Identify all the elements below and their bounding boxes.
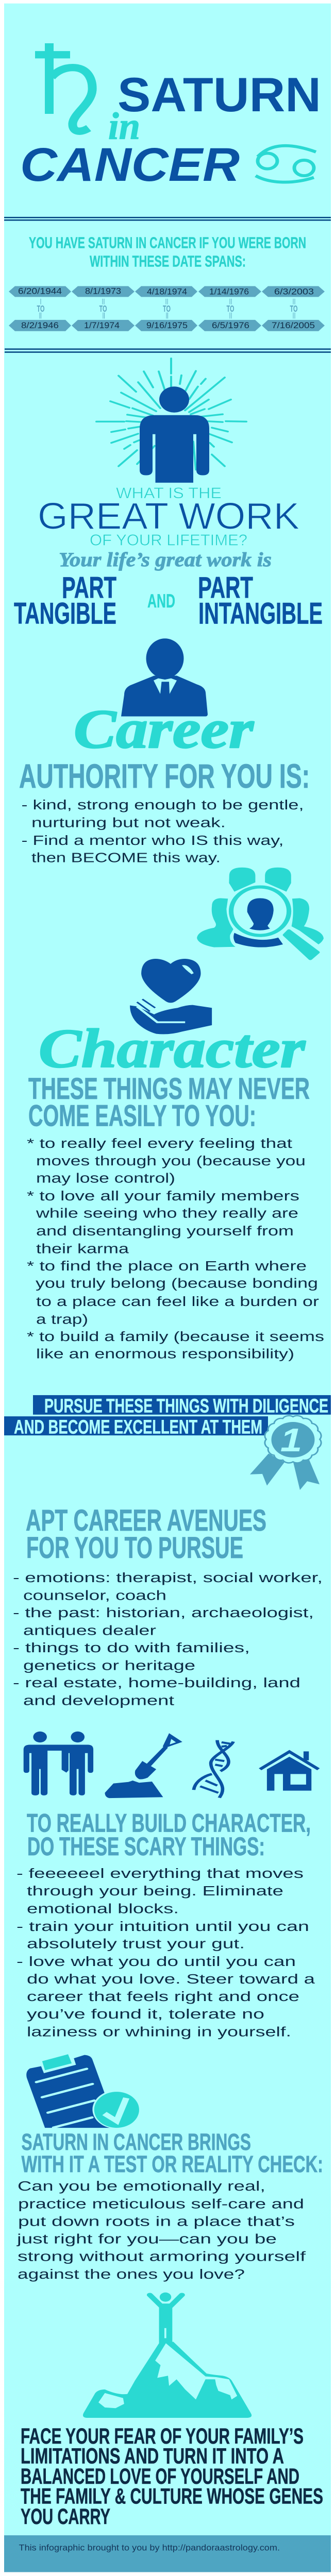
- date hexagons: [9, 286, 325, 331]
- paragraph: reality check questions: just right for you—can you be: [16, 2232, 277, 2247]
- hand: [130, 1005, 212, 1034]
- start dates: 8/1/1973: [85, 286, 121, 296]
- icon: magnifier over people: [197, 868, 324, 959]
- list: authority: then BECOME this way.: [31, 851, 221, 866]
- list: scary things: - love what you do until you can: [16, 1954, 296, 1970]
- icon: number one rosette: [250, 1416, 321, 1490]
- list: career avenues: - real estate, home-building, land: [13, 1675, 300, 1690]
- list: career avenues: - the past: historian, archaeologist,: [13, 1605, 314, 1620]
- list: things that never come easily: while seeing who they really are: [36, 1206, 298, 1221]
- person silhouette: [140, 386, 209, 483]
- left: part tangible: PART: [62, 570, 116, 604]
- list: authority: - Find a mentor who IS this way,: [22, 833, 284, 848]
- icon: house: [260, 1751, 319, 1791]
- right: part intangible: [198, 570, 323, 630]
- TO connectors: TO: [99, 303, 107, 314]
- start dates: 1/14/1976: [209, 286, 249, 296]
- list: things that never come easily: [27, 1136, 324, 1362]
- TO connectors: TO: [37, 303, 45, 314]
- part tangible and part intangible: [14, 570, 323, 630]
- heading: build character: [27, 1808, 311, 1861]
- paragraph: reality check questions: practice meticulous self-care and: [18, 2197, 304, 2212]
- start dates: 6/20/1944: [18, 286, 62, 296]
- list: things that never come easily: you truly belong (because bonding: [36, 1276, 318, 1291]
- end dates: 8/2/1946: [21, 320, 59, 330]
- hand gap and finger lines: [137, 1006, 185, 1022]
- icon: two people: [24, 1732, 93, 1795]
- snow cap: [155, 2343, 237, 2399]
- list: things that never come easily: their karma: [36, 1242, 129, 1257]
- list: scary things: [16, 1866, 315, 2040]
- divider: [5, 348, 331, 353]
- end dates: [21, 320, 315, 330]
- end dates: 1/7/1974: [84, 320, 120, 330]
- list: things that never come easily: * to really feel every feeling that: [27, 1136, 292, 1151]
- list: scary things: - train your intuition until you can: [16, 1919, 309, 1934]
- list: scary things: through your being. Eliminate: [27, 1884, 283, 1899]
- list: career avenues: [13, 1570, 323, 1708]
- list: scary things: do what you love. Steer toward a: [27, 1972, 315, 1987]
- text: and: AND: [147, 590, 175, 612]
- start dates: 6/3/2003: [274, 286, 314, 296]
- list: scary things: - feeeeeel everything that moves: [16, 1866, 304, 1881]
- TO connectors: [37, 299, 298, 318]
- background people: [197, 868, 324, 947]
- radiating rays: [96, 359, 246, 470]
- list: career avenues: - things to do with families,: [13, 1640, 250, 1655]
- start dates: [18, 286, 314, 296]
- end dates: 9/16/1975: [146, 320, 188, 330]
- heading: career: Career: [74, 698, 254, 760]
- list: career avenues: - emotions: therapist, social worker,: [13, 1570, 323, 1585]
- icon: businessman: [121, 638, 208, 717]
- title word in: in: [108, 105, 140, 147]
- icon: DNA helix: [194, 1740, 233, 1798]
- left: part tangible: TANGIBLE: [14, 596, 116, 630]
- clipboard lines: [37, 2069, 94, 2128]
- paragraph: reality check questions: against the ones you love?: [18, 2267, 245, 2282]
- list: things that never come easily: and disentangling yourself from: [36, 1224, 294, 1239]
- list: things that never come easily: moves through you (because you: [36, 1154, 306, 1168]
- list: scary things: laziness or whining in yourself.: [27, 2025, 291, 2040]
- start dates: 4/18/1974: [147, 286, 187, 296]
- paragraph: reality check questions: strong without armoring yourself: [18, 2249, 306, 2264]
- mountain: [83, 2342, 252, 2418]
- leg gap: [164, 2328, 166, 2338]
- icon: clipboard with check: [26, 2054, 141, 2129]
- icon: Saturn glyph: [35, 43, 92, 131]
- end dates: 6/5/1976: [212, 320, 249, 330]
- heading: these things may never come easily: [28, 1072, 310, 1132]
- heading: character: Character: [39, 1018, 306, 1079]
- title word CANCER: CANCER: [20, 139, 240, 191]
- icon: heart in hand: [130, 959, 212, 1034]
- list: authority: - kind, strong enough to be gentle,: [22, 798, 304, 813]
- paragraph: reality check questions: Can you be emotionally real,: [18, 2179, 265, 2194]
- text: what is the: WHAT IS THE: [116, 485, 222, 501]
- title block: [20, 43, 321, 191]
- clipboard: [26, 2055, 111, 2128]
- rosette centre: [271, 1422, 314, 1458]
- list: scary things: career that feels right and once: [27, 1989, 299, 2005]
- heart: [141, 959, 201, 1003]
- list: things that never come easily: like an enormous responsibility): [36, 1347, 294, 1362]
- list: things that never come easily: may lose control): [36, 1171, 175, 1186]
- heart highlight: [182, 965, 194, 974]
- list: things that never come easily: * to love all your family members: [27, 1189, 299, 1204]
- great work heading: [38, 485, 299, 549]
- heading: reality check: [22, 2129, 323, 2177]
- paragraph: reality check questions: [16, 2179, 306, 2282]
- ribbon tails: [250, 1453, 320, 1490]
- check badge: [92, 2090, 141, 2129]
- icon: person with radiating lines: [96, 359, 246, 483]
- person: [150, 2293, 182, 2343]
- list: career avenues: antiques dealer: [23, 1623, 157, 1638]
- end dates: 7/16/2005: [272, 320, 315, 330]
- paragraph: reality check questions: put down roots in a place that’s: [18, 2214, 295, 2229]
- list: career avenues: counselor, coach: [23, 1588, 166, 1603]
- lens ring: [231, 887, 289, 936]
- list: career avenues: and development: [23, 1693, 174, 1708]
- list: things that never come easily: * to find the place on Earth where: [27, 1259, 307, 1274]
- list: authority: nurturing but not weak.: [31, 816, 226, 831]
- TO connectors: TO: [227, 303, 234, 314]
- footer bar: [4, 2535, 331, 2572]
- closing statement: YOU CARRY: [21, 2504, 110, 2529]
- footer credit: This infographic brought to you by http://pandoraastrology.com.: [19, 2543, 280, 2552]
- icon: person on mountain: [83, 2293, 252, 2418]
- left: part tangible: [14, 570, 116, 630]
- divider: [4, 217, 331, 221]
- subheading: your life's great work is: Your life’s great work is: [59, 549, 272, 571]
- text: of your lifetime: OF YOUR LIFETIME?: [90, 532, 247, 549]
- focused person: [233, 898, 283, 947]
- icon: shovel and dirt: [105, 1733, 182, 1798]
- text: great work: GREAT WORK: [38, 495, 299, 537]
- closing statement: [21, 2424, 323, 2529]
- list: things that never come easily: to a place can feel like a burden or: [36, 1294, 320, 1309]
- numeral 1: 1: [280, 1421, 302, 1459]
- heading: apt career avenues: [26, 1503, 266, 1565]
- heading: date spans: [29, 234, 306, 270]
- TO connectors: TO: [163, 303, 171, 314]
- left cutout: [98, 2393, 124, 2408]
- list: scary things: emotional blocks.: [27, 1902, 179, 1917]
- list: things that never come easily: * to build a family (because it seems: [27, 1329, 324, 1344]
- clip: [42, 2054, 72, 2070]
- list: career avenues: genetics or heritage: [23, 1658, 195, 1673]
- TO connectors: TO: [290, 303, 298, 314]
- list: scary things: absolutely trust your gut.: [27, 1937, 245, 1952]
- list: scary things: you’ve found it, tolerate no: [27, 2007, 264, 2022]
- scalloped edge: [265, 1416, 321, 1463]
- date spans section: [9, 234, 325, 331]
- list: authority: [22, 798, 304, 866]
- icon: Cancer glyph: [256, 146, 316, 182]
- handle: [284, 930, 318, 959]
- icon row: careers: [24, 1732, 319, 1798]
- list: things that never come easily: a trap): [36, 1312, 88, 1327]
- right: part intangible: PART: [198, 570, 253, 604]
